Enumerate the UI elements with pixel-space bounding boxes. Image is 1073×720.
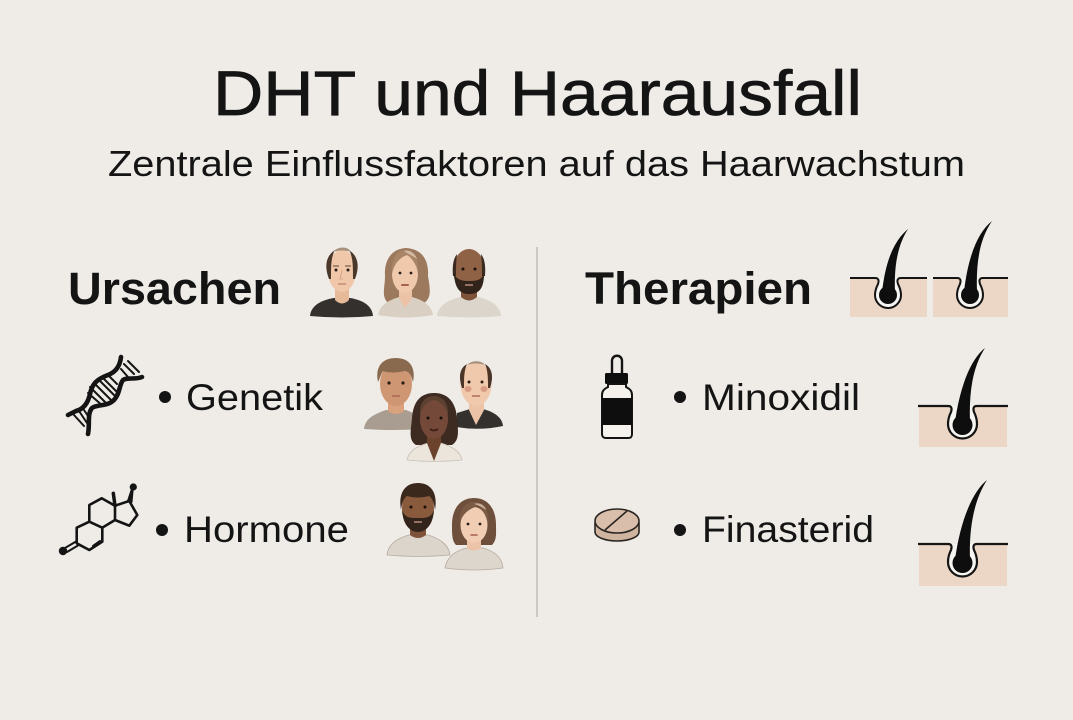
panel: Therapien [585,221,1008,586]
icon: steroid molecule [59,483,137,555]
icon: three people [310,248,501,318]
icon: tablet [595,509,639,541]
bullet and label: Finasterid: Finasterid [702,509,874,550]
hair follicle right [933,221,1008,317]
icon: DNA helix [68,357,142,434]
icon: hair follicle [918,348,1008,447]
subtitle: Zentrale Einflussfaktoren auf das Haarwachstum [108,143,965,184]
man with brown hair [364,358,422,430]
bald man with beard [437,249,501,318]
balding man in black [456,361,503,429]
heading: Therapien: Therapien [585,263,812,314]
icon: group of three people [364,358,503,462]
woman with dark hair [407,393,462,462]
panel: Ursachen [59,248,503,570]
icon: hair follicle [918,480,1008,586]
divider [536,247,538,617]
title: DHT und Haarausfall [213,59,862,129]
icon: dropper bottle [602,356,632,438]
woman with bob hair [445,498,503,570]
bullet and label: Minoxidil: Minoxidil [702,377,860,418]
icon: two hair follicles [850,221,1008,317]
heading: Ursachen: Ursachen [68,263,281,314]
balding man [310,248,373,318]
bullet and label: Hormone: Hormone [184,509,349,550]
icon: two people [387,483,503,570]
man with beard [387,483,450,556]
hair follicle left [850,229,927,317]
woman with long hair [378,248,433,318]
bullet and label: Genetik: Genetik [186,377,324,418]
